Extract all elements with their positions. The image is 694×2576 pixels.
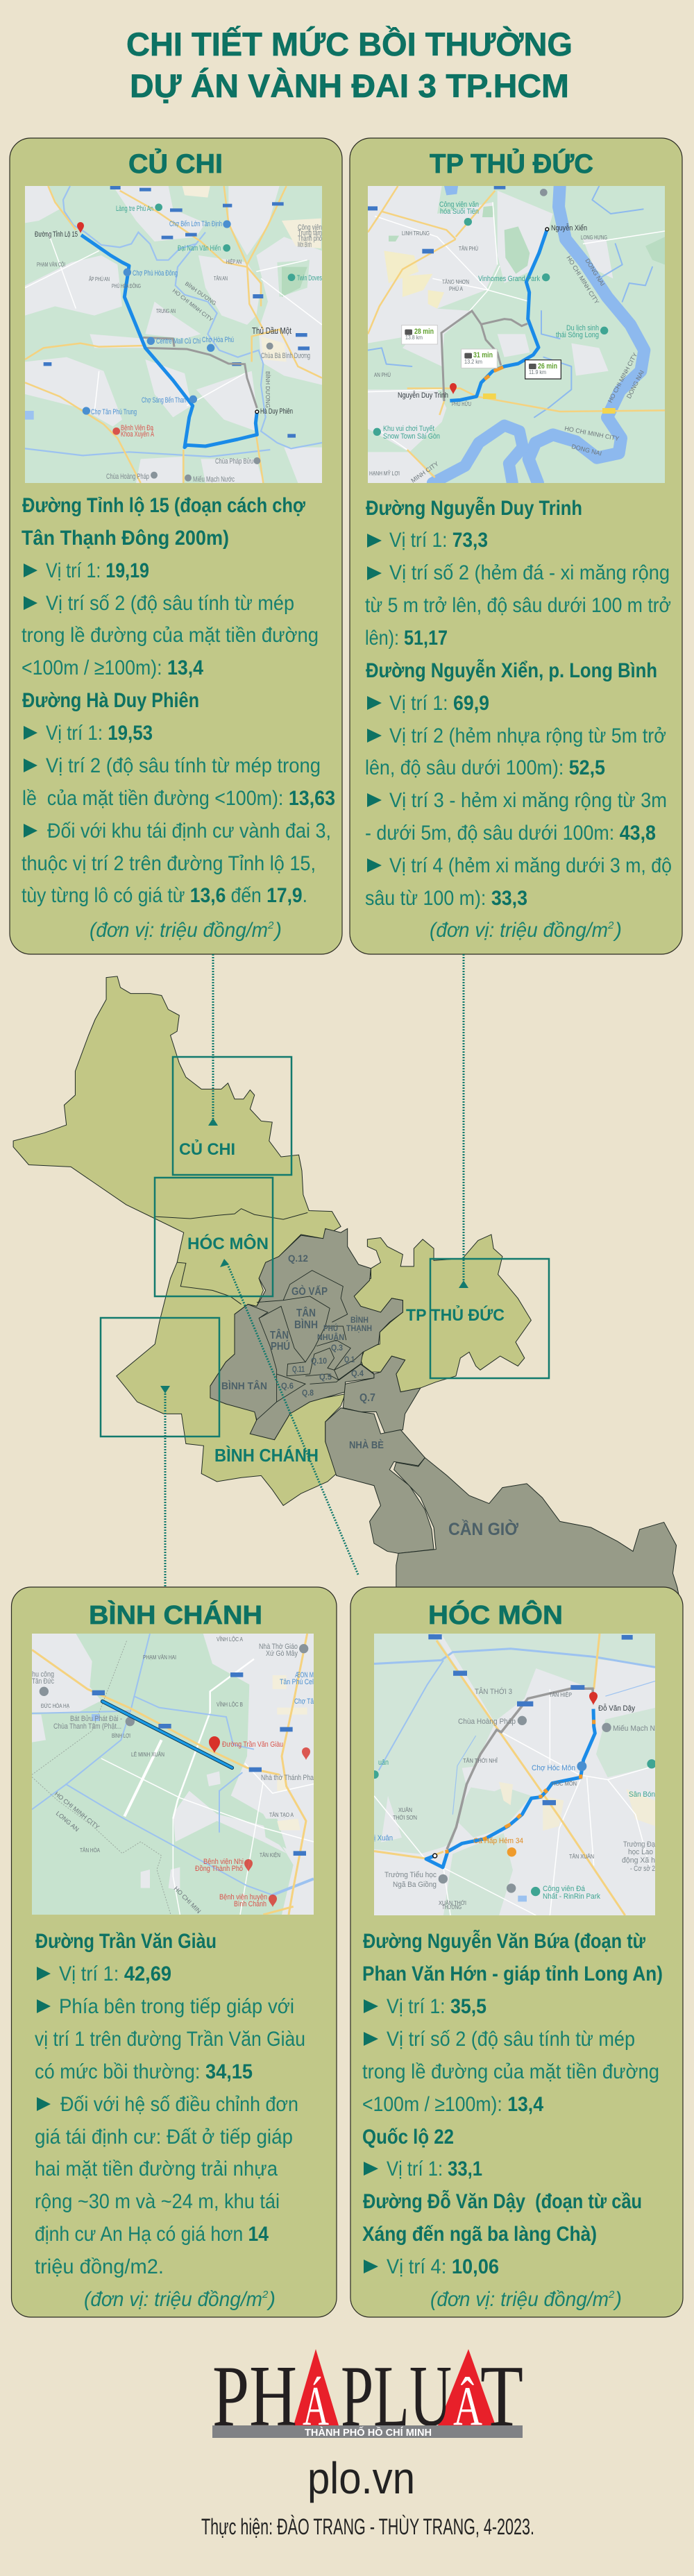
unit note: 2 <box>608 2289 615 2300</box>
text block: Bình Chánh prices: Phía bên trong tiếp giáp với <box>59 1995 294 2018</box>
map: Thủ Đức route: TÂN PHÚ <box>459 246 478 252</box>
text block: Bình Chánh prices: Đường Trần Văn Giàu <box>35 1930 217 1953</box>
unit note: (đơn vị: triệu đồng/m <box>430 919 608 942</box>
map: Hóc Môn route: Chợ Hóc Môn <box>532 1764 575 1772</box>
map: Hóc Môn route: HÓC MÔN <box>552 1781 577 1787</box>
logo: Pháp Luật <box>212 2348 523 2445</box>
map: Củ Chi route: Khoa Xuyên Á <box>121 430 154 439</box>
text block: Thủ Đức prices: Vị trí 1: 69,9 <box>389 692 489 715</box>
text block: Hóc Môn prices: Quốc lộ 22 <box>362 2126 454 2149</box>
map: Củ Chi route: HO CHI MINH CITY <box>171 287 214 323</box>
map: Củ Chi route: BÌNH DƯƠNG <box>264 371 271 408</box>
text block: Củ Chi prices: tùy từng lô có giá từ 13,6 đến 17,9. <box>22 884 307 907</box>
map: Bình Chánh route: ĐỨC HÒA HẠ <box>41 1703 70 1709</box>
district labels: grey: Q.1 <box>344 1355 355 1364</box>
unit note: ) <box>613 919 622 942</box>
map: Củ Chi route: Làng tre Phú An <box>116 205 153 213</box>
panel: Hóc Môn <box>350 1587 683 2317</box>
panel: Bình Chánh <box>11 1587 337 2317</box>
text block: Bình Chánh prices: Vị trí 1: 42,69 <box>59 1963 171 1985</box>
map: Củ Chi route: HIỆP AN <box>226 259 242 265</box>
map: Hóc Môn route: động Xã h <box>622 1856 655 1865</box>
map: Thủ Đức route: HO CHI MINH CITY <box>565 255 600 305</box>
map: Thủ Đức route: TĂNG NHƠN <box>442 279 469 285</box>
map: Củ Chi route: Thành phố <box>298 235 322 243</box>
text block: Hóc Môn prices: Xáng đến ngã ba làng Chà) <box>362 2223 597 2246</box>
district labels: grey: NHÀ BÈ <box>349 1439 384 1451</box>
text block: Bình Chánh prices: Đối với hệ số điều chỉnh đơn <box>60 2093 298 2116</box>
map: Bình Chánh route: Nhà Thờ Giáo <box>259 1643 298 1651</box>
unit note: ) <box>273 919 282 942</box>
text block: Hóc Môn prices: Vị trí 1: 33,1 <box>387 2158 482 2180</box>
map: Bình Chánh route: TÂN TẠO A <box>269 1812 294 1818</box>
map: Củ Chi route: Miếu Mạch Nước <box>193 475 235 484</box>
text block: Củ Chi prices: Đường Tỉnh lộ 15 (đoạn cách chợ <box>22 494 306 517</box>
map: Thủ Đức route: AN PHÚ <box>374 372 391 378</box>
region: inner city districts <box>210 1228 682 1609</box>
district labels: grey: BÌNH <box>350 1314 369 1325</box>
map: Hóc Môn route: ị Xuân <box>374 1834 393 1842</box>
map: Thủ Đức route <box>368 186 665 484</box>
map: Hóc Môn route: TÂN HIỆP <box>549 1692 572 1698</box>
map: Củ Chi route: Twin Doves <box>297 274 322 282</box>
map: Hóc Môn route: Nhất - RinRin Park <box>543 1892 600 1901</box>
map: Thủ Đức route: DONG NAI <box>625 369 645 400</box>
map: Thủ Đức route: Du lịch sinh <box>566 324 599 332</box>
map: Bình Chánh route: Chùa Thanh Tâm (Phật... <box>53 1722 121 1731</box>
map: Bình Chánh route: HO CHI MIN <box>173 1885 202 1915</box>
map: Hóc Môn route: XUÂN <box>398 1807 412 1813</box>
district labels: grey: Q.4 <box>351 1368 364 1378</box>
logo: Pháp Luật: Ậ <box>453 2376 482 2437</box>
map: Thủ Đức route: Vinhomes Grand Park <box>478 275 540 283</box>
unit note: ) <box>266 2288 276 2311</box>
map: Hóc Môn route: Công viên Đá <box>543 1885 586 1893</box>
text block: Bình Chánh prices: hai mặt tiền đường trải nhựa <box>35 2158 278 2180</box>
arrowheads <box>160 1118 468 1393</box>
text block: Bình Chánh prices: triệu đồng/m2. <box>35 2255 164 2278</box>
map: Củ Chi route: Đại Nam Văn Hiến <box>178 244 221 253</box>
text block: Củ Chi prices: Tân Thạnh Đông 200m) <box>22 527 229 550</box>
logo: Pháp Luật: PLU <box>341 2348 452 2445</box>
logo: Pháp Luật: PH <box>212 2348 297 2445</box>
text block: Củ Chi prices: lề của mặt tiền đường <100m): 13,63 <box>22 787 335 810</box>
map: Bình Chánh route: LÊ MINH XUÂN <box>131 1752 164 1758</box>
map: Củ Chi route: Chùa Hoàng Pháp <box>106 473 149 481</box>
text block: Bình Chánh prices: giá tái định cư: Đất ở tiếp giáp <box>35 2126 293 2149</box>
map: Củ Chi route: Thủ Dầu Một <box>252 325 291 336</box>
unit note: (đơn vị: triệu đồng/m <box>84 2288 262 2311</box>
map: Củ Chi route: Đường Tỉnh Lộ 15 <box>35 230 78 239</box>
unit note: ) <box>613 2288 622 2311</box>
icon: red pin <box>589 1692 598 1705</box>
text block: Hóc Môn prices: Đường Nguyễn Văn Bứa (đoạn từ <box>363 1929 645 1953</box>
map: Bình Chánh route: VĨNH LỘC A <box>217 1636 244 1643</box>
locator squares <box>101 1057 549 1437</box>
map: Bình Chánh route <box>32 1634 314 1915</box>
map: Thủ Đức route: 13.8 km <box>405 334 423 341</box>
text block: Thủ Đức prices: Vị trí 2 (hẻm nhựa rộng từ 5m trở <box>389 724 666 747</box>
credit: Thực hiện: ĐÀO TRANG - THÙY TRANG, 4-2023. <box>201 2514 534 2539</box>
map: Bình Chánh route: Nhà thờ Thánh Pha <box>261 1774 314 1782</box>
text block: Củ Chi prices: Vị trí số 2 (độ sâu tính từ mép <box>46 592 294 615</box>
text block: Thủ Đức prices: Vị trí số 2 (hẻm đá - xi măng rộng <box>389 561 670 584</box>
district labels: grey: Q.5 <box>319 1372 332 1382</box>
logo: Pháp Luật: T <box>480 2348 523 2445</box>
map: Củ Chi route: Trung tâm <box>298 229 322 237</box>
district labels: grey: THẠNH <box>346 1323 372 1333</box>
unit note: 2 <box>262 2289 269 2300</box>
map: Hóc Môn route: Cá Hấp Hẻm 34 <box>473 1837 523 1845</box>
map: Củ Chi route: Công viên <box>298 223 322 232</box>
map: Củ Chi route: PHẠM VĂN CỘI <box>37 262 65 268</box>
map: Bình Chánh route: Đường Trần Văn Giàu <box>222 1740 283 1749</box>
district labels: grey: Q.11 <box>292 1364 305 1374</box>
district labels: highlighted: BÌNH CHÁNH <box>214 1445 319 1466</box>
map: Thủ Đức route: HO CHI MINH CITY <box>607 352 638 404</box>
heading: Bình Chánh: BÌNH CHÁNH <box>89 1600 262 1630</box>
dotted leader lines <box>165 954 464 1587</box>
region: outer districts (Củ Chi, Hóc Môn, Bình Chánh) <box>13 976 345 1505</box>
text block: Bình Chánh prices: rộng ~30 m và ~24 m, khu tái <box>35 2190 280 2213</box>
panel: TP Thủ Đức <box>350 138 682 954</box>
map: Bình Chánh route: Tân Đức <box>32 1677 54 1686</box>
map: Bình Chánh route: HO CHI MINH CITY <box>53 1790 101 1831</box>
icon: red pins <box>209 1736 310 1907</box>
map: Thủ Đức route: hóa Suối Tiên <box>440 207 479 216</box>
district labels: grey: Q.3 <box>331 1343 343 1353</box>
text block: Hóc Môn prices <box>362 1929 663 2278</box>
map: Củ Chi route <box>25 186 322 484</box>
map: Bình Chánh route: TÂN HÒA <box>80 1847 101 1854</box>
map: Thủ Đức route: PHÚ A <box>449 286 464 292</box>
map: Củ Chi route: Chợ Phú Hòa Đông <box>133 269 178 278</box>
map: Bình Chánh route: Bình Chánh <box>234 1900 266 1908</box>
text block: Thủ Đức prices: Đường Nguyễn Duy Trinh <box>366 496 582 520</box>
district labels: grey: PHÚ <box>271 1339 290 1353</box>
district labels: grey: Q.10 <box>311 1356 327 1366</box>
logo: Pháp Luật: THÀNH PHỐ HỒ CHÍ MINH <box>305 2426 432 2439</box>
text block: Thủ Đức prices: lên): 51,17 <box>365 627 448 650</box>
district labels: grey: Q.6 <box>281 1381 294 1391</box>
map: Củ Chi route: Chùa Pháp Bửu <box>215 457 253 466</box>
map: Thủ Đức route: LONG HƯNG <box>581 235 607 241</box>
chart: Ho Chi Minh City district map <box>13 954 682 1609</box>
map: Hóc Môn route: XUÂN THỚI <box>439 1900 466 1906</box>
text block: Hóc Môn prices: trong lề đường của mặt tiền đường <box>362 2060 659 2083</box>
district labels: grey: PHÚ <box>323 1323 338 1333</box>
map: Hóc Môn route: Đỗ Văn Dậy <box>598 1704 635 1713</box>
map: Thủ Đức route: 31 min <box>473 351 493 359</box>
map: Củ Chi route: BÌNH DƯƠNG <box>184 280 217 307</box>
map: Thủ Đức route: Khu vui chơi Tuyết <box>383 425 434 433</box>
map: Thủ Đức route: Công viên văn <box>439 201 479 209</box>
region: TP Thủ Đức <box>352 1235 531 1392</box>
map: Củ Chi route: Chợ Bến Lớn Tân Định <box>169 220 222 228</box>
map: Củ Chi route: PHÚ HÒA ĐÔNG <box>112 283 141 289</box>
district labels: grey: Q.12 <box>288 1253 308 1264</box>
map: Bình Chánh route: LONG AN <box>55 1810 81 1833</box>
map: Bình Chánh route: Bát Bửu Phát Đài - <box>70 1715 122 1723</box>
map: Thủ Đức route: Snow Town Sài Gòn <box>383 432 440 441</box>
map: Hóc Môn route: TÂN THỚI 3 <box>475 1687 512 1696</box>
logo: Pháp Luật: Á <box>303 2376 329 2437</box>
map: Củ Chi route: Chợ Tân Phú Trung <box>91 408 137 416</box>
map: Bình Chánh route: VĨNH LỘC B <box>217 1702 243 1708</box>
map: Hóc Môn route: học Lao <box>628 1848 653 1856</box>
map: Bình Chánh route: ÆON M <box>295 1671 314 1679</box>
text block: Củ Chi prices <box>22 494 335 907</box>
map: Bình Chánh route: Bệnh viện Nhi <box>203 1858 244 1866</box>
map: Hóc Môn route: Ngã Ba Giồng <box>393 1881 437 1889</box>
map: Thủ Đức route: Nguyễn Duy Trinh <box>398 391 448 400</box>
text block: Củ Chi prices: Vị trí 2 (độ sâu tính từ mép trong <box>46 754 321 777</box>
map: Hóc Môn route: Sân Bón <box>629 1790 655 1799</box>
map: Thủ Đức route: 26 min <box>538 362 557 371</box>
text block: Thủ Đức prices: sâu từ 100 m): 33,3 <box>365 887 527 910</box>
district labels: grey: CẦN GIỜ <box>448 1518 519 1539</box>
unit note: 2 <box>267 920 274 931</box>
map: Hóc Môn route: Miếu Mạch N <box>613 1725 655 1733</box>
map: Thủ Đức route: Nguyễn Xiển <box>551 223 587 232</box>
map: Thủ Đức route: PHÚ HỮU <box>452 401 471 407</box>
map: Hóc Môn route: TÂN XUÂN <box>569 1854 594 1860</box>
icon: red pin <box>450 383 457 394</box>
website: plo.vn <box>307 2453 415 2503</box>
district labels: grey: NHUẬN <box>317 1332 344 1342</box>
district labels: grey: TÂN <box>296 1306 316 1319</box>
unit note: (đơn vị: triệu đồng/m <box>90 919 268 942</box>
text block: Thủ Đức prices: Vị trí 3 - hẻm xi măng rộng từ 3m <box>389 789 667 812</box>
map: Bình Chánh route: Xứ Gò Mây <box>266 1650 298 1658</box>
district labels: grey: BÌNH TÂN <box>221 1380 267 1392</box>
district labels: highlighted: CỦ CHI <box>179 1139 235 1159</box>
district labels: grey: Q.7 <box>359 1392 375 1404</box>
map: Bình Chánh route: hu công <box>32 1670 54 1679</box>
text block: Thủ Đức prices <box>365 496 672 910</box>
text block: Thủ Đức prices: lên, độ sâu dưới 100m): 52,5 <box>365 756 605 779</box>
panel: Củ Chi <box>10 138 342 954</box>
map: Bình Chánh route: BÌNH LỢI <box>112 1733 130 1739</box>
map: Củ Chi route: Mới Bình <box>298 241 312 249</box>
text block: Thủ Đức prices: Vị trí 1: 73,3 <box>389 529 488 552</box>
map: Củ Chi route: Centre Mall Củ Chi <box>156 337 201 346</box>
map: Thủ Đức route: thái Sông Long <box>556 331 599 339</box>
district labels: grey <box>221 1253 519 1539</box>
heading: Hóc Môn: HÓC MÔN <box>428 1599 563 1630</box>
map: Thủ Đức route: LINH TRUNG <box>402 230 430 237</box>
map: Củ Chi route: TÂN AN <box>214 276 228 282</box>
map: Củ Chi route: Chợ Sáng Bến Than <box>142 396 186 405</box>
text block: Hóc Môn prices: Đường Đỗ Văn Dậy (đoạn từ cầu <box>363 2189 642 2213</box>
district labels: grey: TÂN <box>270 1328 289 1341</box>
map: Bình Chánh route: Tân Phú Cel <box>280 1678 314 1686</box>
map: Hóc Môn route: THƯỜNG <box>442 1904 462 1910</box>
map: Củ Chi route: TRUNG AN <box>156 308 176 314</box>
text block: Hóc Môn prices: Vị trí 4: 10,06 <box>387 2255 499 2278</box>
map: Hóc Môn route: TÂN THỚI NHỈ <box>463 1758 498 1764</box>
text block: Củ Chi prices: Đối với khu tái định cư vành đai 3, <box>47 820 331 842</box>
text block: Bình Chánh prices <box>35 1930 305 2278</box>
text block: Củ Chi prices: <100m / ≥100m): 13,4 <box>22 656 203 679</box>
district labels: highlighted: TP THỦ ĐỨC <box>406 1305 505 1325</box>
district labels: grey: GÒ VẤP <box>291 1285 328 1298</box>
district labels: grey: BÌNH <box>294 1318 318 1331</box>
map: Hóc Môn route: THỚI SƠN <box>393 1815 417 1821</box>
text block: Hóc Môn prices: Vị trí 1: 35,5 <box>387 1995 486 2018</box>
map: Bình Chánh route: Đồng Thành Phố <box>195 1865 243 1873</box>
map: Thủ Đức route: HẠNH MỸ LỢI <box>369 471 400 477</box>
map: Củ Chi route: Bệnh Viện Đa <box>121 424 154 432</box>
text block: Củ Chi prices: trong lề đường của mặt tiền đường <box>22 624 319 647</box>
text block: Củ Chi prices: Đường Hà Duy Phiên <box>22 689 199 712</box>
district labels: highlighted: HÓC MÔN <box>187 1234 269 1253</box>
text block: Củ Chi prices: Vị trí 1: 19,19 <box>46 559 149 582</box>
map: Củ Chi route: ẤP PHÚ AN <box>89 276 110 282</box>
district labels: highlighted <box>179 1139 505 1466</box>
map: Thủ Đức route: 13.2 km <box>464 359 482 365</box>
map: Hóc Môn route: Trường Tiểu học <box>384 1871 437 1879</box>
map: Hóc Môn route: - Cơ sở 2 <box>630 1865 655 1873</box>
unit note: 2 <box>607 920 614 931</box>
title <box>126 26 573 104</box>
map: Thủ Đức route: DONG NAI <box>571 443 602 457</box>
title: CHI TIẾT MỨC BỒI THƯỜNG <box>126 26 573 62</box>
map: Hóc Môn route: Trường Đạ <box>623 1840 656 1849</box>
text block: Hóc Môn prices: <100m / ≥100m): 13,4 <box>362 2093 543 2116</box>
district labels: grey: Q.8 <box>302 1388 314 1398</box>
text block: Bình Chánh prices: vị trí 1 trên đường Trần Văn Giàu <box>35 2028 305 2051</box>
text block: Củ Chi prices: Vị trí 1: 19,53 <box>46 722 153 745</box>
heading: Củ Chi: CỦ CHI <box>128 149 223 179</box>
text block: Thủ Đức prices: - dưới 5m, độ sâu dưới 100m: 43,8 <box>365 822 656 845</box>
map: Hóc Môn route <box>371 1634 657 1915</box>
map: Thủ Đức route: MINH CITY <box>409 460 440 484</box>
text block: Bình Chánh prices: có mức bồi thường: 34,15 <box>35 2060 253 2083</box>
text block: Bình Chánh prices: định cư An Hạ có giá hơn 14 <box>35 2223 269 2246</box>
map: Thủ Đức route: 28 min <box>414 328 434 336</box>
map: Củ Chi route: Chùa Bà Bình Dương <box>261 352 310 360</box>
text block: Hóc Môn prices: Vị trí số 2 (độ sâu tính từ mép <box>387 2028 635 2051</box>
text block: Củ Chi prices: thuộc vị trí 2 trên đường Tỉnh lộ 15, <box>22 852 316 875</box>
map: Bình Chánh route: Chợ Tâ <box>294 1697 314 1706</box>
map: Củ Chi route: Hà Duy Phiên <box>260 407 293 416</box>
map: Bình Chánh route: TÂN KIỆN <box>260 1852 280 1858</box>
map: Hóc Môn route: uân <box>378 1759 389 1767</box>
map: Bình Chánh route: PHẠM VĂN HAI <box>143 1654 176 1661</box>
heading: TP Thủ Đức: TP THỦ ĐỨC <box>430 149 593 179</box>
icon: red pin <box>77 222 84 233</box>
map: Hóc Môn route: Chùa Hoàng Pháp <box>458 1718 516 1726</box>
map: Thủ Đức route: 11.9 km <box>529 369 546 375</box>
map: Củ Chi route: Chợ Hòa Phú <box>202 336 234 344</box>
title: DỰ ÁN VÀNH ĐAI 3 TP.HCM <box>130 67 569 104</box>
unit note: (đơn vị: triệu đồng/m <box>430 2288 609 2311</box>
map: Thủ Đức route: DONG NAI <box>584 257 606 287</box>
map: Bình Chánh route: Bệnh viện huyện <box>219 1893 267 1901</box>
map: Thủ Đức route: HO CHI MINH CITY <box>564 425 620 442</box>
